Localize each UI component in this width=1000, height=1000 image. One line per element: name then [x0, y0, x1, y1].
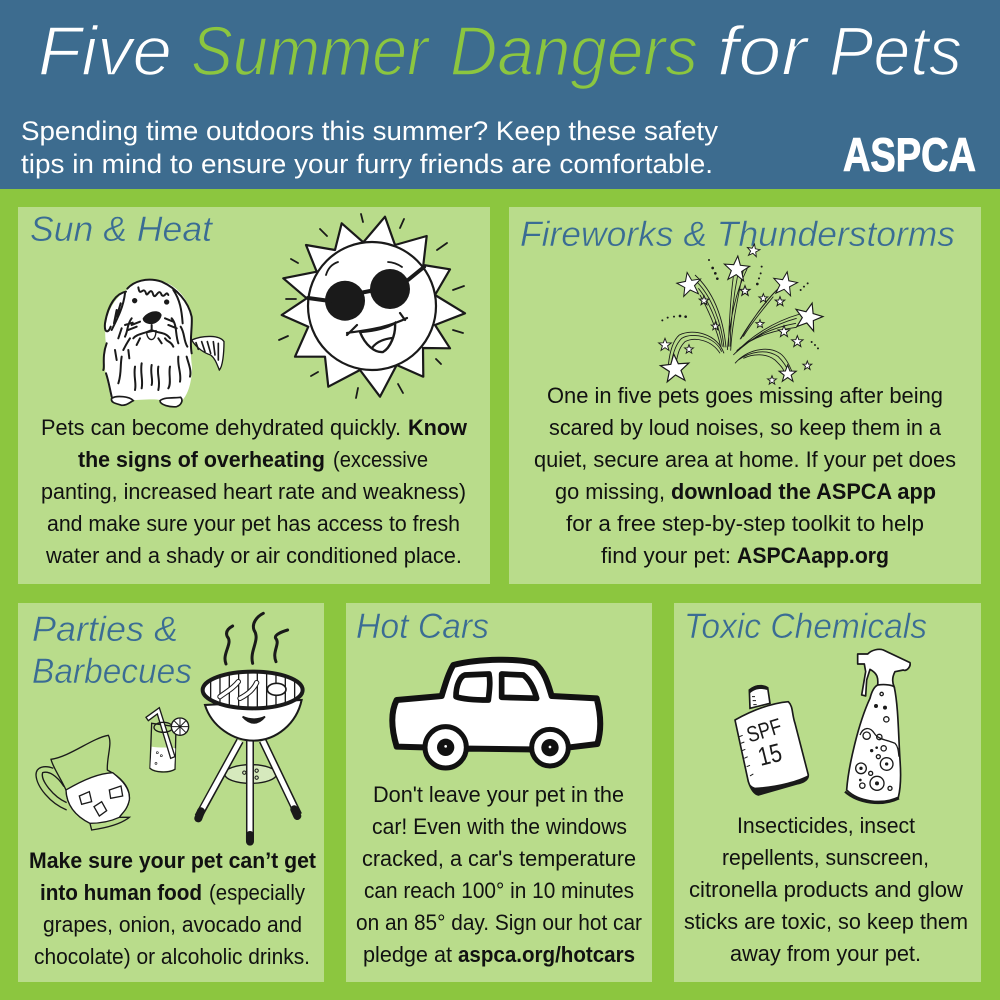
text: toxic chemicals: Insecticides, insect — [737, 813, 915, 838]
text: parties and barbecues — [29, 848, 317, 969]
icon: dog — [103, 279, 224, 407]
title — [38, 12, 962, 90]
text: hot cars: car! Even with the windows — [372, 814, 627, 839]
icon: sunscreen bottle: 15 — [755, 737, 785, 772]
text: toxic chemicals: repellents, sunscreen, — [722, 845, 929, 870]
text: parties and barbecues: grapes, onion, avocado and — [43, 912, 302, 937]
text: hot cars: can reach 100° in 10 minutes — [364, 878, 634, 903]
heading: toxic chemicals: Toxic Chemicals — [684, 607, 927, 646]
text: fireworks and thunderstorms: quiet, secure area at home. If your pet does — [534, 447, 956, 472]
panel: parties and barbecues — [18, 603, 324, 982]
text: fireworks and thunderstorms: download the ASPCA app — [671, 479, 936, 504]
text: hot cars — [356, 782, 642, 967]
title: for — [717, 12, 810, 90]
icon: grill — [198, 613, 303, 842]
text: hot cars: aspca.org/hotcars — [458, 942, 635, 967]
text: sun and heat: Know — [408, 415, 468, 440]
text: hot cars: pledge at — [363, 942, 452, 967]
text: toxic chemicals — [684, 813, 968, 966]
text: sun and heat: the signs of overheating — [78, 447, 325, 472]
panel: sun and heat — [18, 207, 490, 584]
text: sun and heat: and make sure your pet has access to fresh — [47, 511, 460, 536]
icon: fireworks — [659, 243, 826, 384]
text: fireworks and thunderstorms: go missing, — [555, 479, 665, 504]
subtitle — [21, 116, 719, 179]
icon: sunscreen bottle — [735, 685, 808, 795]
text: fireworks and thunderstorms: ASPCAapp.org — [737, 543, 889, 568]
icon: car — [392, 660, 600, 768]
text: hot cars: Don't leave your pet in the — [373, 782, 624, 807]
text: fireworks and thunderstorms: scared by loud noises, so keep them in a — [549, 415, 942, 440]
heading: sun and heat: Sun & Heat — [30, 210, 213, 249]
text: fireworks and thunderstorms — [534, 383, 956, 568]
heading: hot cars: Hot Cars — [356, 607, 489, 646]
panel: fireworks and thunderstorms — [509, 207, 981, 584]
text: fireworks and thunderstorms: for a free step-by-step toolkit to help — [566, 511, 924, 536]
icon: sunscreen bottle: SPF — [743, 713, 785, 747]
text: fireworks and thunderstorms: One in five pets goes missing after being — [547, 383, 943, 408]
text: sun and heat — [41, 415, 468, 568]
panel: hot cars — [346, 603, 652, 982]
text: hot cars: on an 85° day. Sign our hot car — [356, 910, 642, 935]
icon: spray bottle — [845, 649, 910, 803]
text: hot cars: cracked, a car's temperature — [362, 846, 636, 871]
title: Dangers — [450, 12, 698, 90]
heading: fireworks and thunderstorms: Fireworks & Thunderstorms — [520, 215, 955, 254]
text: toxic chemicals: citronella products and glow — [689, 877, 963, 902]
heading: parties and barbecues — [32, 610, 192, 691]
text: parties and barbecues: Make sure your pet can’t get — [29, 848, 317, 873]
icon: pitcher — [36, 735, 129, 830]
text: fireworks and thunderstorms: find your pet: — [601, 543, 731, 568]
heading: parties and barbecues: Parties & — [32, 610, 178, 649]
text: toxic chemicals: sticks are toxic, so keep them — [684, 909, 968, 934]
icon: sun with sunglasses — [279, 214, 465, 398]
text: parties and barbecues: chocolate) or alcoholic drinks. — [34, 944, 310, 969]
icon: cocktail glass — [146, 708, 189, 772]
text: parties and barbecues: (especially — [209, 880, 305, 905]
title: Pets — [829, 12, 962, 90]
text: sun and heat: Pets can become dehydrated quickly. — [41, 415, 401, 440]
text: sun and heat: panting, increased heart rate and weakness) — [41, 479, 466, 504]
subtitle: tips in mind to ensure your furry friends are comfortable. — [21, 149, 713, 179]
heading: parties and barbecues: Barbecues — [32, 652, 192, 691]
text: sun and heat: water and a shady or air conditioned place. — [45, 543, 462, 568]
title: Summer — [191, 12, 430, 90]
panel: toxic chemicals — [674, 603, 981, 982]
title: Five — [38, 12, 172, 90]
subtitle: Spending time outdoors this summer? Keep these safety — [21, 116, 719, 146]
header banner — [0, 0, 1000, 189]
text: sun and heat: (excessive — [333, 447, 428, 472]
text: toxic chemicals: away from your pet. — [730, 941, 921, 966]
text: parties and barbecues: into human food — [40, 880, 202, 905]
